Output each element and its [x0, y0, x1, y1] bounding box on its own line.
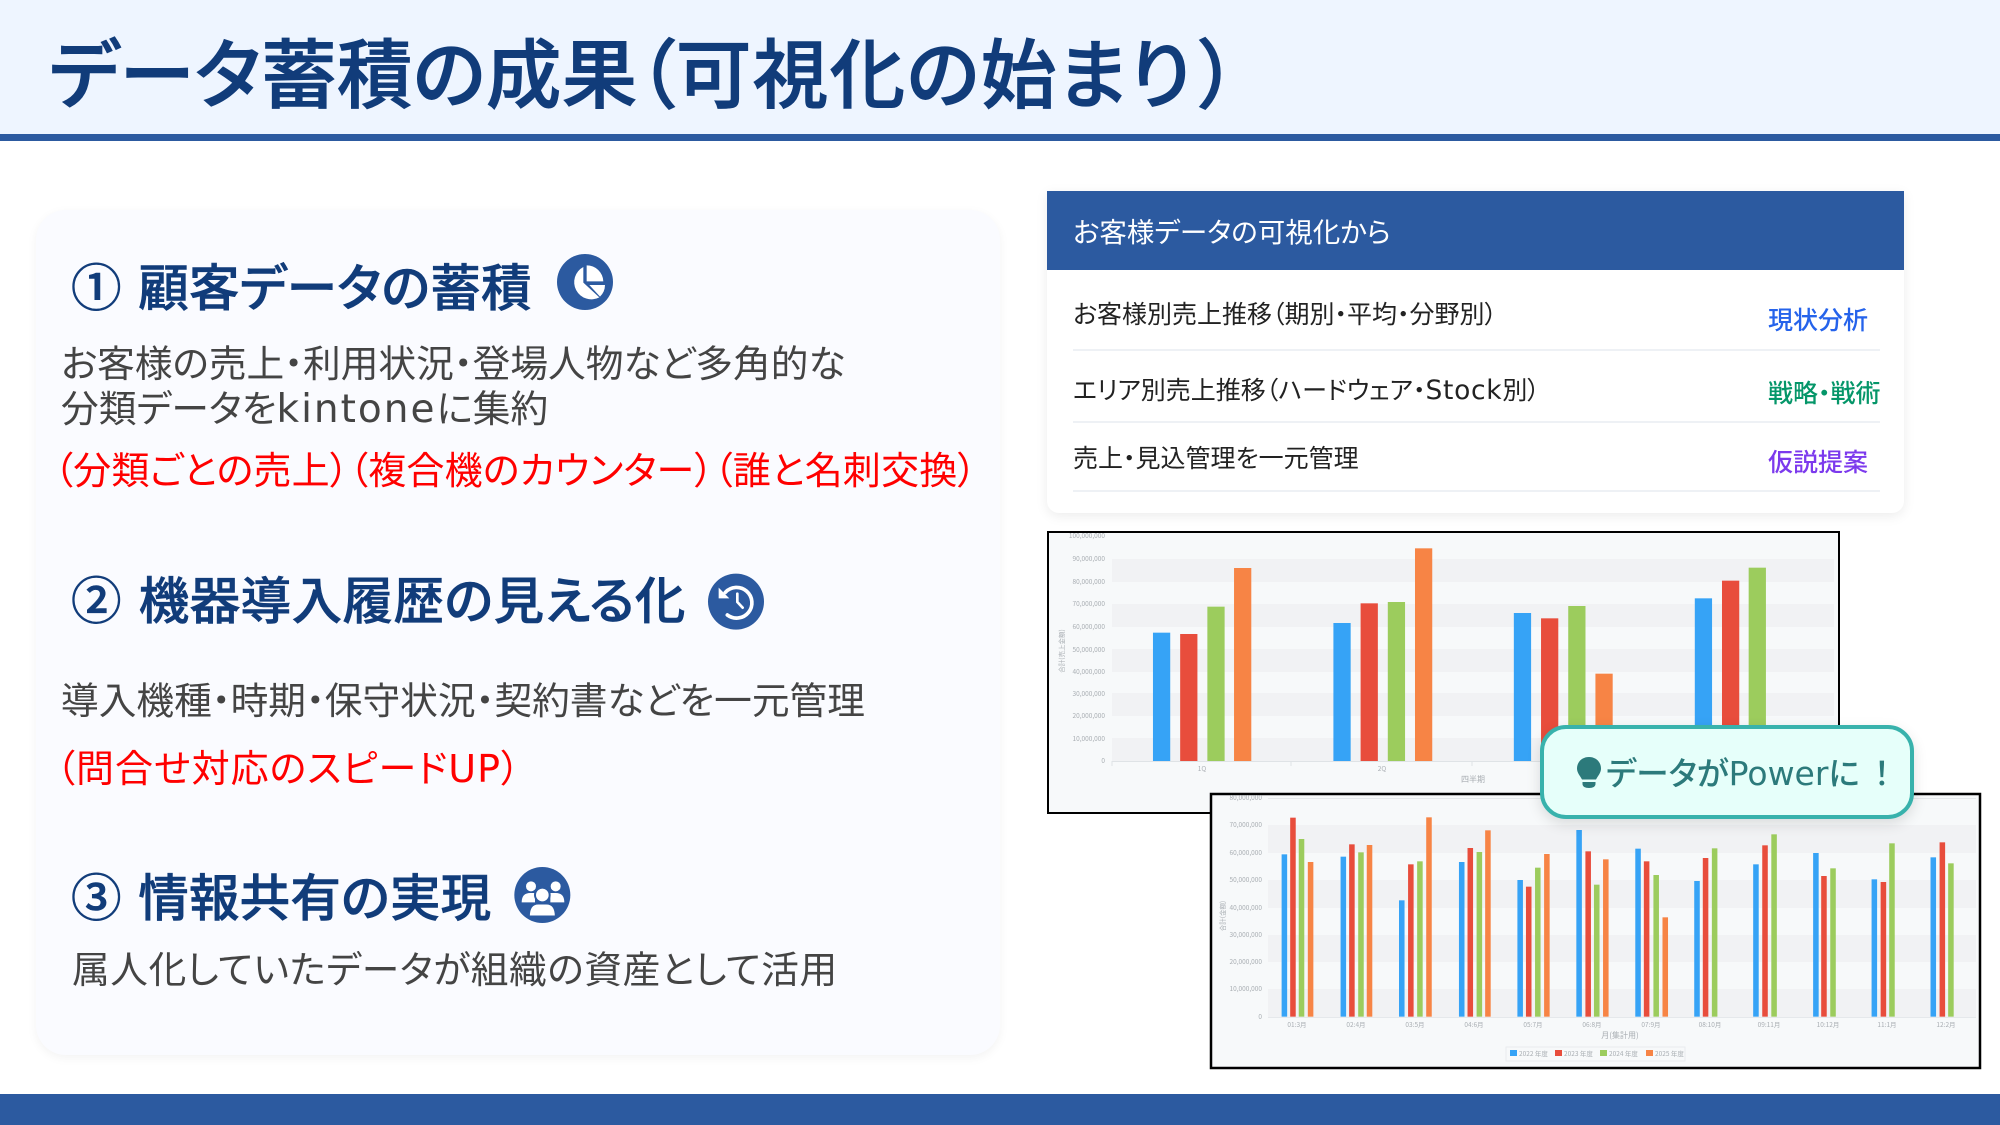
row 1	[1073, 271, 1880, 351]
icon: history clock	[708, 574, 764, 630]
chart: monthly sales: 40,000,000	[1230, 902, 1262, 912]
chart: monthly sales	[1210, 792, 1982, 1070]
chart: quarterly sales: 30,000,000	[1073, 688, 1105, 698]
chart: monthly sales: 0	[1258, 1011, 1262, 1021]
chart: monthly sales: 20,000,000	[1230, 956, 1262, 966]
panel: customer data visualization card	[1047, 191, 1904, 513]
chart: monthly sales: 02:4月	[1346, 1019, 1366, 1029]
chart: quarterly sales: 2Q	[1378, 763, 1386, 773]
chart: monthly sales: 10,000,000	[1230, 983, 1262, 993]
chart: quarterly sales: 80,000,000	[1073, 576, 1105, 586]
body text 1	[61, 333, 845, 433]
section 2: equipment history	[56, 560, 865, 793]
chart: monthly sales: 09:11月	[1758, 1019, 1780, 1029]
chart: monthly sales: 11:1月	[1877, 1019, 1897, 1029]
row 2	[1073, 351, 1880, 423]
icon: people group	[514, 867, 570, 923]
icon: light bulb	[1577, 757, 1601, 788]
chart: quarterly sales	[1047, 531, 1840, 814]
row 1 text: お客様別売上推移（期別・平均・分野別）	[1073, 295, 1497, 331]
chart: monthly sales: 月(集計用)	[1601, 1030, 1639, 1041]
header band	[0, 0, 2000, 141]
chart: quarterly sales: 70,000,000	[1073, 598, 1105, 608]
heading 1: ① 顧客データの蓄積	[71, 247, 532, 321]
card header	[1047, 191, 1904, 270]
chart: quarterly sales: 60,000,000	[1073, 621, 1105, 631]
chart: monthly sales: 06:8月	[1582, 1019, 1602, 1029]
chart: monthly sales: 50,000,000	[1230, 874, 1262, 884]
chart: monthly sales: 12:2月	[1936, 1019, 1956, 1029]
chart: quarterly sales: 0	[1101, 755, 1105, 765]
body text 1: お客様の売上・利用状況・登場人物など多角的な	[61, 333, 845, 388]
body text 2: 導入機種・時期・保守状況・契約書などを一元管理	[61, 670, 865, 725]
row 3 tag: 仮説提案	[1768, 443, 1868, 479]
chart: quarterly sales: 90,000,000	[1073, 553, 1105, 563]
chart: monthly sales: 04:6月	[1464, 1019, 1484, 1029]
chart: monthly sales: 2024 年度	[1609, 1048, 1638, 1058]
heading 3: ③ 情報共有の実現	[71, 857, 491, 931]
section 3: information sharing	[71, 857, 838, 994]
red note 1: （分類ごとの売上）（複合機のカウンター）（誰と名刺交換）	[54, 440, 977, 495]
chart: monthly sales: 合計(金額)	[1217, 901, 1227, 931]
card title: お客様データの可視化から	[1073, 210, 1391, 250]
chart: monthly sales: 2023 年度	[1564, 1048, 1593, 1058]
chart: quarterly sales: 50,000,000	[1073, 644, 1105, 654]
row 3	[1073, 423, 1880, 492]
heading 2: ② 機器導入履歴の見える化	[71, 560, 686, 634]
chart: quarterly sales: 10,000,000	[1073, 733, 1105, 743]
chart: quarterly sales: 1Q	[1198, 763, 1206, 773]
chart: quarterly sales: 合計(売上金額)	[1056, 629, 1066, 673]
chart: monthly sales: 10:12月	[1817, 1019, 1839, 1029]
title: データ蓄積の成果（可視化の始まり）	[49, 14, 1237, 124]
chart: quarterly sales: 40,000,000	[1073, 666, 1105, 676]
row 2 text: エリア別売上推移（ハードウェア・Stock別）	[1073, 371, 1540, 407]
chart: monthly sales: 80,000,000	[1230, 792, 1262, 802]
callout text: データがPowerに ！	[1606, 748, 1890, 795]
chart: monthly sales: 05:7月	[1523, 1019, 1543, 1029]
chart: monthly sales: 03:5月	[1405, 1019, 1425, 1029]
chart: monthly sales: 70,000,000	[1230, 819, 1262, 829]
chart: monthly sales: 60,000,000	[1230, 847, 1262, 857]
footer band	[0, 1094, 2000, 1125]
red note 2: （問合せ対応のスピードUP）	[56, 738, 521, 793]
chart: monthly sales: 01:3月	[1287, 1019, 1307, 1029]
callout: data power	[1540, 725, 1914, 819]
section 1: customer data	[54, 247, 977, 495]
body text 3: 属人化していたデータが組織の資産として活用	[72, 939, 838, 994]
chart: monthly sales: 2022 年度	[1519, 1048, 1548, 1058]
body text 1: 分類データをkintoneに集約	[61, 378, 548, 433]
row 2 tag: 戦略・戦術	[1768, 374, 1881, 410]
panel: achievements	[36, 210, 1000, 1055]
chart: monthly sales: 08:10月	[1699, 1019, 1721, 1029]
chart: quarterly sales: 20,000,000	[1073, 710, 1105, 720]
chart: monthly sales: 2025 年度	[1655, 1048, 1684, 1058]
icon: pie chart	[557, 254, 613, 310]
row 1 tag: 現状分析	[1768, 301, 1868, 337]
row 3 text: 売上・見込管理を一元管理	[1073, 439, 1359, 475]
chart: quarterly sales: 四半期	[1461, 774, 1485, 785]
chart: monthly sales: 07:9月	[1641, 1019, 1661, 1029]
chart: monthly sales: 30,000,000	[1230, 929, 1262, 939]
